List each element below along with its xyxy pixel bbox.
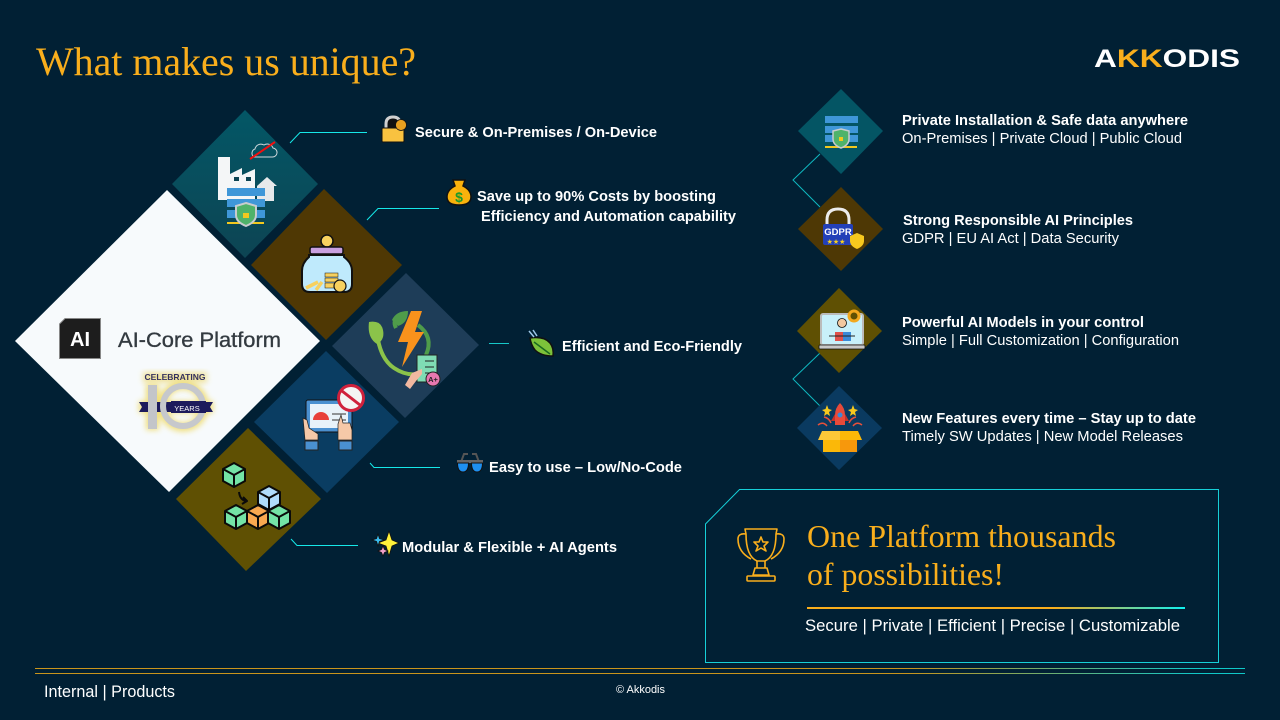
text: responsible AI: Strong Responsible AI Principles bbox=[903, 212, 1133, 229]
text: responsible AI: GDPR | EU AI Act | Data Security bbox=[902, 230, 1119, 247]
feature: secure: Secure & On-Premises / On-Device bbox=[415, 124, 657, 141]
heading bbox=[807, 518, 1116, 592]
heading: One Platform thousands bbox=[807, 518, 1116, 554]
feature: easy: Easy to use – Low/No-Code bbox=[489, 459, 682, 476]
text: new features: Timely SW Updates | New Model Releases bbox=[902, 428, 1183, 445]
text: private installation bbox=[902, 112, 1188, 147]
icon: money bag: $ bbox=[455, 189, 463, 205]
icon: AI chip: AI bbox=[70, 329, 90, 351]
values line: Secure | Private | Efficient | Precise | Customizable bbox=[805, 616, 1180, 635]
connector: top pair bbox=[793, 154, 820, 207]
icon: GDPR lock bbox=[823, 209, 864, 249]
text: AI models bbox=[902, 314, 1179, 349]
icon: AI chip bbox=[60, 318, 100, 358]
icon: rocket in gift box bbox=[818, 403, 862, 452]
panel: modular diamond bbox=[176, 428, 321, 571]
badge: celebrating 10 years bbox=[139, 372, 213, 430]
leader line: secure bbox=[290, 132, 367, 143]
panel: low-code diamond bbox=[254, 351, 399, 493]
panel: new features bbox=[797, 386, 1196, 470]
feature: costs bbox=[477, 188, 737, 225]
icon: money bag bbox=[447, 180, 471, 205]
icon: trophy bbox=[738, 529, 784, 581]
icon: server shield bbox=[825, 116, 858, 148]
leader line: easy bbox=[370, 463, 440, 468]
icon: building blocks bbox=[223, 463, 290, 529]
leader line: eco bbox=[489, 342, 509, 344]
icon: leaf bbox=[529, 330, 553, 356]
heading: of possibilities! bbox=[807, 556, 1004, 592]
panel: savings diamond bbox=[251, 189, 402, 340]
logo: Akkodis: AKK ODIS bbox=[1094, 45, 1240, 73]
panel: secure diamond bbox=[172, 110, 318, 258]
feature: modular: Modular & Flexible + AI Agents bbox=[402, 539, 617, 556]
feature: eco: Efficient and Eco-Friendly bbox=[562, 338, 743, 355]
text: responsible AI bbox=[902, 212, 1133, 247]
icon: GDPR lock: GDPR bbox=[824, 227, 852, 238]
panel: AI-Core Platform diamond bbox=[15, 190, 320, 492]
icon: laptop with gear bbox=[819, 311, 865, 349]
leader line: costs bbox=[367, 208, 439, 220]
connector: bottom pair bbox=[793, 353, 820, 406]
icon: GDPR lock: ★★★ bbox=[827, 238, 845, 246]
icon: on-premises factory and server bbox=[218, 142, 277, 226]
icon: coin jar bbox=[302, 235, 352, 292]
text: private installation: On-Premises | Private Cloud | Public Cloud bbox=[902, 130, 1182, 147]
icon: padlock bbox=[382, 117, 406, 142]
leader line: modular bbox=[291, 539, 358, 546]
text: private installation: Private Installation & Safe data anywhere bbox=[902, 112, 1188, 129]
badge: celebrating 10 years: CELEBRATING bbox=[144, 372, 206, 382]
panel: responsible AI bbox=[798, 187, 1133, 271]
icon: sunglasses bbox=[457, 454, 483, 472]
text: AI models: Powerful AI Models in your control bbox=[902, 314, 1144, 331]
copyright: © Akkodis bbox=[616, 684, 665, 696]
icon: sparkles bbox=[372, 531, 399, 556]
text: AI models: Simple | Full Customization | Configuration bbox=[902, 332, 1179, 349]
callout: one platform bbox=[706, 490, 1218, 662]
panel: eco diamond bbox=[332, 273, 479, 418]
icon: tablet with touching hands bbox=[303, 386, 364, 450]
text: new features: New Features every time – Stay up to date bbox=[902, 410, 1196, 427]
panel: private installation bbox=[798, 89, 1188, 174]
badge: celebrating 10 years: YEARS bbox=[174, 404, 200, 413]
footer label: Internal | Products bbox=[44, 682, 175, 701]
panel: AI models bbox=[797, 288, 1179, 373]
icon: plant, energy bolt and checklist bbox=[369, 311, 440, 389]
title: What makes us unique? bbox=[36, 39, 416, 84]
icon: plant, energy bolt and checklist: A+ bbox=[428, 375, 439, 384]
feature: costs: Save up to 90% Costs by boosting bbox=[477, 188, 716, 205]
feature: costs: Efficiency and Automation capability bbox=[481, 208, 737, 225]
text: new features bbox=[902, 410, 1196, 445]
platform name: AI-Core Platform bbox=[118, 329, 281, 352]
